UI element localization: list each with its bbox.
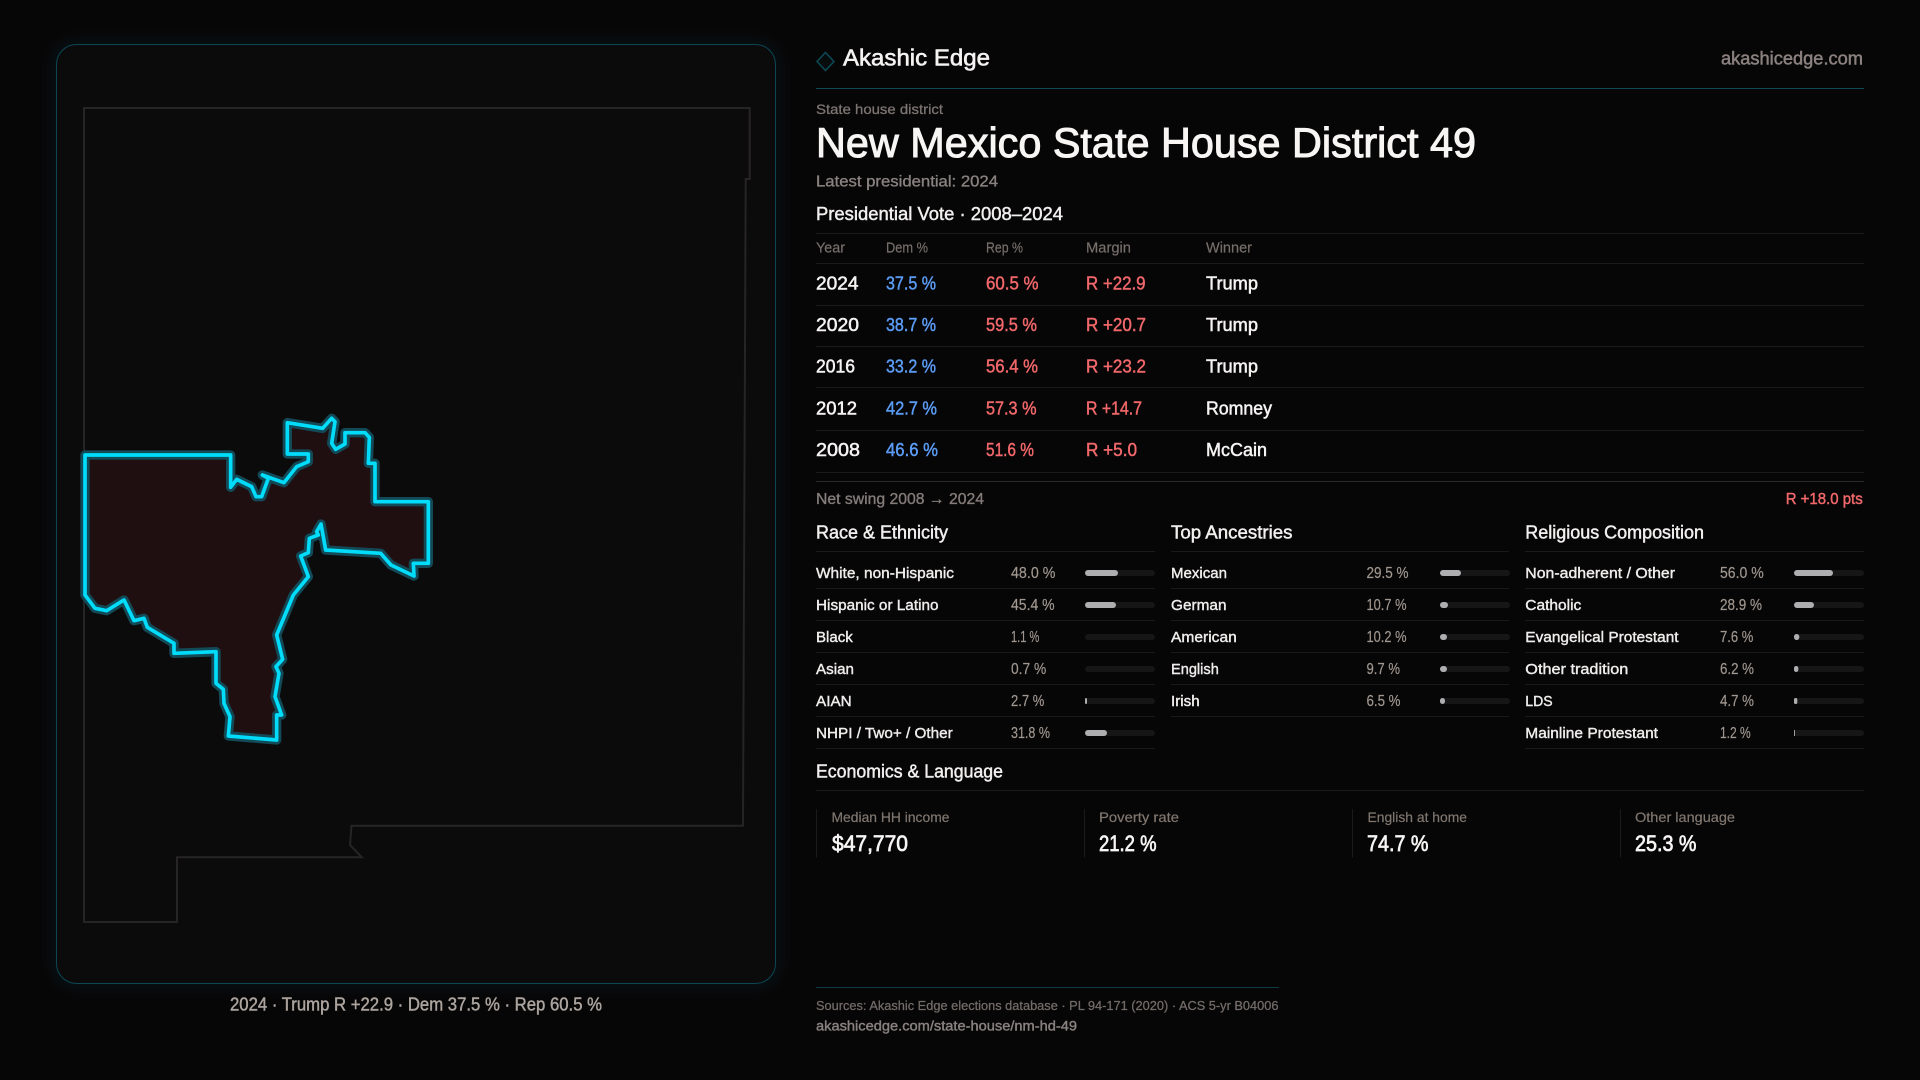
panel: district map — [56, 44, 776, 984]
row: nhpi two or more other — [816, 725, 1155, 742]
main title: New Mexico State House District 49 — [816, 119, 1476, 166]
table: presidential vote — [816, 204, 1864, 472]
row: 2024: R +22.9 — [1086, 273, 1146, 293]
row: nhpi two or more other: NHPI / Two+ / Other — [816, 725, 953, 742]
row: 2024: 60.5 % — [986, 273, 1038, 293]
row: 2020: 2020 — [816, 315, 859, 335]
table header row: Winner — [1206, 241, 1252, 257]
row: english — [1171, 661, 1510, 678]
table header row — [816, 241, 1252, 257]
stat: english at home — [1352, 809, 1467, 858]
row: other tradition: Other tradition — [1525, 661, 1628, 678]
row: 2016 — [816, 357, 1258, 377]
row: white non-hispanic: White, non-Hispanic — [816, 565, 955, 582]
brand name: Akashic Edge — [843, 45, 990, 71]
table header row: Rep % — [986, 241, 1023, 257]
heading: Top Ancestries — [1171, 522, 1292, 542]
row: english: 9.7 % — [1366, 661, 1400, 678]
row: american: American — [1171, 629, 1237, 646]
page url: akashicedge.com/state-house/nm-hd-49 — [816, 1018, 1077, 1034]
row: 2020: R +20.7 — [1086, 315, 1146, 335]
source note: Sources: Akashic Edge elections database · PL 94-171 (2020) · ACS 5-yr B04006 — [816, 998, 1278, 1013]
row: 2012: 42.7 % — [886, 398, 937, 418]
row: non-adherent other: Non-adherent / Other — [1525, 565, 1675, 582]
row: evangelical protestant: 7.6 % — [1720, 629, 1753, 646]
subtitle: Latest presidential: 2024 — [816, 174, 998, 190]
stat: median household income — [816, 809, 950, 858]
row: black: 1.1 % — [1011, 629, 1039, 646]
heading: Religious Composition — [1525, 522, 1704, 542]
row: other tradition — [1525, 661, 1864, 678]
row: german: German — [1171, 597, 1226, 614]
row: aian — [816, 693, 1155, 710]
panel: race and ethnicity — [816, 522, 1155, 748]
row: 2016: R +23.2 — [1086, 357, 1146, 377]
stat: other language: 25.3 % — [1635, 831, 1696, 856]
row: 2016: 2016 — [816, 357, 855, 377]
row: irish: 6.5 % — [1366, 693, 1400, 710]
stat: poverty rate: 21.2 % — [1099, 831, 1156, 856]
row: 2008: McCain — [1206, 440, 1267, 460]
icon: diamond logo — [817, 52, 834, 70]
row: asian: 0.7 % — [1011, 661, 1046, 678]
row: 2012: 57.3 % — [986, 398, 1036, 418]
row: mainline protestant: Mainline Protestant — [1525, 725, 1659, 742]
row: non-adherent other: 56.0 % — [1720, 565, 1764, 582]
row: lds: LDS — [1525, 693, 1553, 710]
row: 2020: Trump — [1206, 315, 1258, 335]
footer: sources — [816, 988, 1279, 1034]
row: 2012: R +14.7 — [1086, 398, 1142, 418]
stat: other language: Other language — [1635, 809, 1735, 825]
row: american: 10.2 % — [1366, 629, 1406, 646]
stat: english at home: 74.7 % — [1367, 831, 1428, 856]
row: mainline protestant — [1525, 725, 1864, 742]
stat: median household income: $47,770 — [832, 831, 908, 856]
row: 2020: 38.7 % — [886, 315, 936, 335]
row: 2016: 56.4 % — [986, 357, 1038, 377]
row: nhpi two or more other: 31.8 % — [1011, 725, 1050, 742]
title block — [816, 101, 1476, 190]
row: mexican — [1171, 565, 1510, 582]
row: black: Black — [816, 629, 853, 646]
row: 2016: 33.2 % — [886, 357, 936, 377]
row: mexican: Mexican — [1171, 565, 1227, 582]
row: hispanic or latino: 45.4 % — [1011, 597, 1055, 614]
row: black — [816, 629, 1155, 646]
row: evangelical protestant: Evangelical Protestant — [1525, 629, 1679, 646]
row: 2008 — [816, 440, 1267, 460]
stat: other language — [1620, 809, 1735, 858]
row: lds: 4.7 % — [1720, 693, 1754, 710]
map: highlighted district 49 — [85, 418, 428, 740]
row: non-adherent other — [1525, 565, 1864, 582]
row: aian: 2.7 % — [1011, 693, 1044, 710]
row: lds — [1525, 693, 1864, 710]
row: 2012: Romney — [1206, 398, 1272, 418]
row: 2024 — [816, 273, 1258, 293]
table heading: Presidential Vote · 2008–2024 — [816, 204, 1063, 224]
net swing callout: R +18.0 pts — [1786, 491, 1863, 508]
row: english: English — [1171, 661, 1219, 678]
row: mexican: 29.5 % — [1366, 565, 1408, 582]
stat: english at home: English at home — [1368, 809, 1467, 825]
row: hispanic or latino — [816, 597, 1155, 614]
net swing callout: Net swing 2008 → 2024 — [816, 491, 984, 508]
row: white non-hispanic — [816, 565, 1155, 582]
row: 2024: Trump — [1206, 273, 1258, 293]
row: 2024: 37.5 % — [886, 273, 936, 293]
row: hispanic or latino: Hispanic or Latino — [816, 597, 938, 614]
row: german — [1171, 597, 1510, 614]
row: 2020 — [816, 315, 1258, 335]
row: german: 10.7 % — [1366, 597, 1406, 614]
heading: Economics & Language — [816, 761, 1003, 781]
panel: religious composition — [1525, 522, 1864, 748]
heading: Race & Ethnicity — [816, 522, 948, 542]
row: 2008: 51.6 % — [986, 440, 1034, 460]
row: 2008: 46.6 % — [886, 440, 938, 460]
row: catholic — [1525, 597, 1864, 614]
row: 2024: 2024 — [816, 273, 858, 293]
header: brand bar — [816, 45, 1864, 88]
row: catholic: 28.9 % — [1720, 597, 1762, 614]
stat: median household income: Median HH income — [832, 809, 950, 825]
table header row: Year — [816, 241, 845, 257]
table header row: Dem % — [886, 241, 928, 257]
row: mainline protestant: 1.2 % — [1720, 725, 1751, 742]
eyebrow: State house district — [816, 101, 943, 117]
row: 2016: Trump — [1206, 357, 1258, 377]
row: 2008: R +5.0 — [1086, 440, 1137, 460]
row: 2008: 2008 — [816, 440, 860, 460]
row: american — [1171, 629, 1510, 646]
row: 2012 — [816, 398, 1272, 418]
row: white non-hispanic: 48.0 % — [1011, 565, 1055, 582]
map: state outline of New Mexico — [84, 108, 750, 922]
row: 2012: 2012 — [816, 398, 857, 418]
row: irish: Irish — [1171, 693, 1200, 710]
row: asian: Asian — [816, 661, 854, 678]
stat: poverty rate: Poverty rate — [1099, 809, 1179, 825]
panel: economics and language — [816, 761, 1864, 858]
row: other tradition: 6.2 % — [1720, 661, 1754, 678]
row: catholic: Catholic — [1525, 597, 1582, 614]
row: asian — [816, 661, 1155, 678]
net swing callout — [816, 491, 1863, 508]
row: evangelical protestant — [1525, 629, 1864, 646]
panel: top ancestries — [1171, 522, 1510, 716]
table header row: Margin — [1086, 241, 1131, 257]
row: aian: AIAN — [816, 693, 852, 710]
row: irish — [1171, 693, 1510, 710]
row: 2020: 59.5 % — [986, 315, 1037, 335]
map caption: 2024 · Trump R +22.9 · Dem 37.5 % · Rep 60.5 % — [230, 994, 602, 1014]
stat: poverty rate — [1084, 809, 1179, 858]
brand url: akashicedge.com — [1721, 48, 1863, 68]
